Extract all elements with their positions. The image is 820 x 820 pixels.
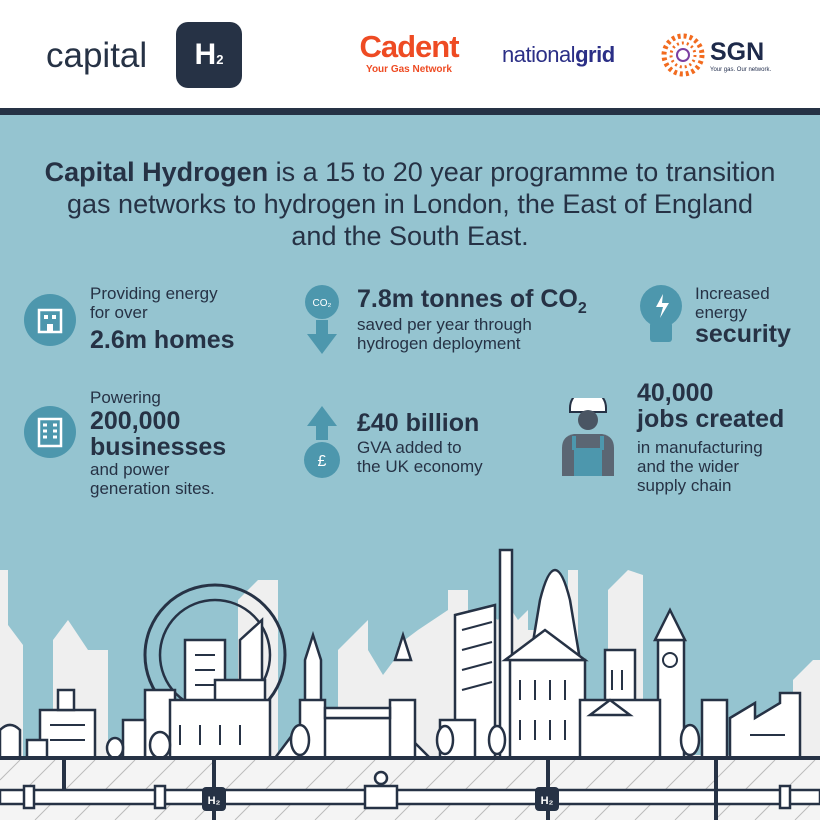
stat: CO2: 7.8m tonnes of CO2 (357, 285, 587, 317)
stat: businesses: Powering (90, 388, 161, 407)
stat: energy security: security (695, 320, 791, 348)
stat: homes: 2.6m homes (90, 326, 235, 354)
intro text (45, 157, 775, 251)
background silhouettes (0, 570, 820, 765)
logo: capital H2 (46, 22, 242, 88)
icon: house (24, 294, 76, 346)
stat: CO2: hydrogen deployment (357, 334, 521, 353)
stat: businesses: 200,000 (90, 407, 180, 435)
buildings (0, 725, 20, 758)
windows (50, 622, 785, 745)
skyline illustration: H₂ (541, 795, 554, 807)
stat: jobs (562, 379, 784, 495)
stat: businesses: businesses (90, 433, 226, 461)
stat: GVA: the UK economy (357, 457, 483, 476)
logo: capital H2: capital (46, 36, 147, 75)
text: generation sites. (90, 479, 215, 498)
icon: worker (562, 398, 614, 476)
ground line and pipe (0, 756, 820, 760)
skyline illustration: H₂ (208, 795, 221, 807)
stat: energy security (640, 284, 791, 348)
logo: Cadent: Cadent (359, 29, 459, 64)
stat: homes: Providing energy (90, 284, 218, 303)
icon: lightbulb (640, 285, 682, 342)
stat: businesses (24, 388, 226, 498)
icon: CO2 down arrow (305, 285, 339, 354)
icon: CO2 down arrow: CO₂ (313, 298, 332, 309)
trees (107, 725, 699, 758)
pipe joints (24, 786, 790, 808)
stat: jobs: in manufacturing (637, 438, 763, 457)
logo: national grid: nationalgrid (502, 42, 615, 67)
logo: SGN: Your gas. Our network. (710, 67, 771, 73)
intro text: Capital Hydrogen is a 15 to 20 year programme to transition (45, 157, 775, 187)
stat: GVA: GVA added to (357, 438, 462, 457)
stat: jobs: jobs created (637, 405, 784, 433)
logo: capital H2: H2 (195, 38, 223, 71)
H2 valves (202, 787, 226, 811)
stat: GVA: £40 billion (357, 409, 479, 437)
header (0, 0, 820, 115)
stat: CO2 (305, 285, 587, 354)
icon: office (24, 406, 76, 458)
logo: SGN: SGN (710, 38, 764, 66)
icon: pound up arrow (304, 406, 340, 478)
logo: SGN (662, 34, 771, 76)
stat: GVA (304, 406, 483, 478)
stat: jobs: and the wider (637, 457, 739, 476)
stat: CO2: saved per year through (357, 315, 532, 334)
ground hatch (0, 758, 820, 820)
stat: businesses: and power (90, 460, 169, 479)
stat: energy security: Increased (695, 284, 770, 303)
logo: Cadent: Your Gas Network (366, 64, 452, 75)
intro text: gas networks to hydrogen in London, the East of England (67, 189, 753, 219)
icon: pound up arrow: £ (318, 453, 327, 470)
stat: energy security: energy (695, 303, 747, 322)
intro text: and the South East. (291, 221, 529, 251)
stat: jobs: supply chain (637, 476, 732, 495)
stat: homes: for over (90, 303, 148, 322)
skyline illustration (0, 548, 820, 820)
stat: homes (24, 284, 235, 354)
stat: jobs: 40,000 (637, 379, 713, 407)
